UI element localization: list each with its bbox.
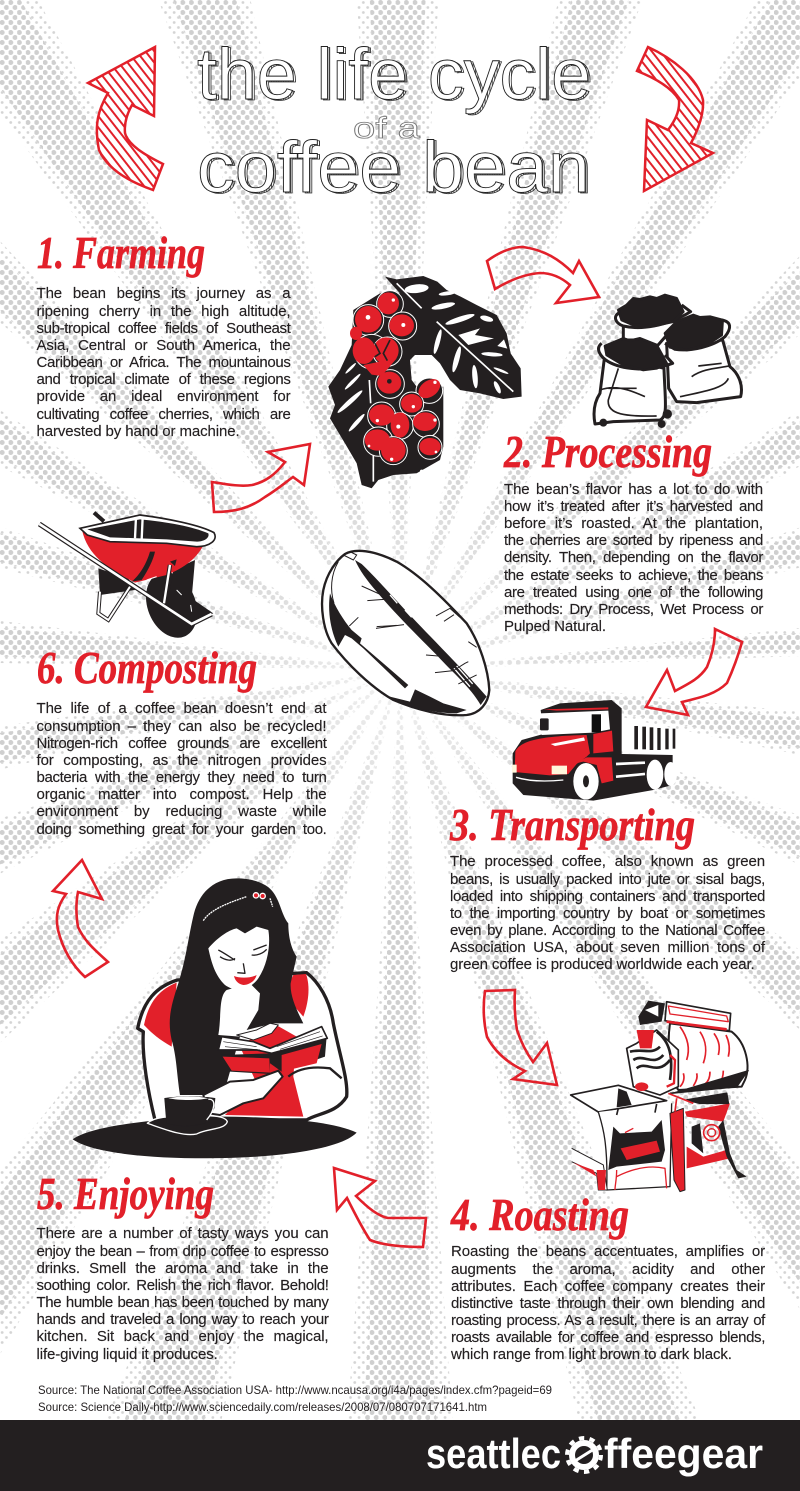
sources: Source: Science Daily-http://www.sciencedaily.com/releases/2008/07/080707171641.htm [38,1400,487,1414]
panel: 2. Processing: the cherries are sorted by ripeness and [504,532,763,549]
icon: wheelbarrow [39,513,215,645]
panel: 1. Farming: The bean begins its journey as a [36,285,290,302]
panel: 1. Farming: Caribbean or Africa. The mountainous [36,354,290,371]
panel: 6. Composting: The life of a coffee bean doesn’t end at [36,700,326,717]
panel: 4. Roasting: attributes. Each coffee company creates their [451,1278,765,1295]
footer bar with logo: ffeegear [604,1430,763,1477]
panel: 2. Processing: methods: Dry Process, Wet Process or [504,601,763,618]
panel: 4. Roasting: 4. Roasting [450,1190,629,1240]
panel: 4. Roasting: distinctive taste through their own blending and [451,1295,765,1312]
panel: 5. Enjoying: life-giving liquid it produces. [36,1346,218,1363]
panel: 2. Processing [503,427,764,635]
arrow: farming to processing [487,247,599,303]
panel: 6. Composting: for composting, as the nitrogen provides [36,752,326,769]
panel: 6. Composting: environment by reducing waste while [36,803,326,820]
panel: 3. Transporting: loaded into shipping containers and transported [450,888,765,905]
title: coffee bean [199,129,592,209]
title: the life cycle [197,35,591,115]
panel: 1. Farming: harvested by hand or machine. [36,423,240,440]
sources: Source: The National Coffee Association USA- http://www.ncausa.org/i4a/pages/index.cfm?pageid=69 [38,1383,552,1397]
icon: coffee sacks [594,295,741,428]
icon: coffee bean [322,551,489,715]
footer bar with logo: seattlec [426,1430,561,1477]
panel: 2. Processing: density. Then, depending on the flavor [504,549,763,566]
arrow: enjoying to composting [53,860,108,977]
panel: 5. Enjoying: There are a number of tasty ways you can [36,1225,328,1242]
panel: 1. Farming: cultivating coffee cherries, which are [36,406,290,423]
panel: 5. Enjoying: enjoy the bean – from drip coffee to espresso [36,1243,328,1260]
icon: coffee roaster machine [571,1001,748,1192]
panel: 2. Processing: before it’s roasted. At the plantation, [504,515,763,532]
panel: 5. Enjoying: 5. Enjoying [36,1169,214,1219]
panel: 2. Processing: are treated using one of the following [504,584,763,601]
panel: 5. Enjoying: kitchen. Sit back and enjoy the magical, [36,1328,328,1345]
panel: 3. Transporting [449,800,766,973]
panel: 3. Transporting: to the importing country by boat or sometimes [450,905,765,922]
panel: 2. Processing: how it’s treated after it’s harvested and [504,498,763,515]
title: of a [353,112,420,145]
panel: 2. Processing: the estate seeks to achieve, the beans [504,567,763,584]
panel: 1. Farming: sub-tropical coffee fields of Southeast [36,320,290,337]
panel: 3. Transporting: green coffee is produced worldwide each year. [450,956,755,973]
title [197,35,593,209]
panel: 3. Transporting: even by plane. According to the National Coffee [450,922,765,939]
panel: 2. Processing: Pulped Natural. [504,618,606,635]
icon: truck [512,700,677,801]
panel: 2. Processing: 2. Processing [503,427,712,477]
panel: 6. Composting: bacteria with the energy they need to turn [36,769,326,786]
icon: woman reading with coffee [73,878,357,1158]
panel: 1. Farming: Asia, Central or South America, the [36,337,290,354]
arrow: title left hatched [88,47,163,190]
panel: 1. Farming: ripening cherry in the high altitude, [36,303,290,320]
title: the life cycle [199,36,593,116]
panel: 1. Farming: provide an ideal environment for [36,388,290,405]
panel: 1. Farming [36,228,291,440]
panel: 3. Transporting: Association USA, about seven million tons of [450,939,765,956]
panel: 5. Enjoying: soothing color. Relish the rich flavor. Behold! [36,1277,328,1294]
panel: 6. Composting: doing something great for your garden too. [36,821,326,838]
panel: 5. Enjoying: hands and traveled a long way to reach your [36,1311,328,1328]
panel: 4. Roasting: roasting process. As a result, there is an array of [451,1312,765,1329]
panel: 6. Composting: consumption – they can also be recycled! [36,718,326,735]
sources [38,1383,552,1414]
panel: 4. Roasting [450,1190,766,1363]
icon: coffee branch with cherries [328,276,522,488]
panel: 6. Composting: Nitrogen-rich coffee grounds are excellent [36,735,326,752]
panel: 4. Roasting: roasts available for coffee and espresso blends, [451,1329,765,1346]
panel: 5. Enjoying [36,1169,329,1363]
arrow: title right hatched [637,47,713,191]
arrow: processing to transporting [646,629,742,715]
panel: 6. Composting: 6. Composting [36,643,256,693]
panel: 6. Composting [36,643,327,838]
panel: 4. Roasting: Roasting the beans accentuates, amplifies or [451,1243,765,1260]
panel: 5. Enjoying: The humble bean has been touched by many [36,1294,328,1311]
panel: 4. Roasting: which range from light brown to dark black. [451,1346,732,1363]
panel: 5. Enjoying: drinks. Smell the aroma and take in the [36,1260,328,1277]
panel: 1. Farming: 1. Farming [36,228,204,278]
panel: 3. Transporting: beans, is usually packed into jute or sisal bags, [450,871,765,888]
panel: 2. Processing: The bean’s flavor has a lot to do with [504,481,763,498]
arrow: transporting to roasting [484,990,557,1085]
arrow: enjoying/composting to farming [212,444,310,512]
panel: 6. Composting: organic matter into compost. Help the [36,786,326,803]
footer bar with logo [0,1420,800,1491]
panel: 4. Roasting: augments the aroma, acidity and other [451,1261,765,1278]
title: coffee bean [197,128,590,208]
arrow: roasting to enjoying [334,1168,426,1247]
panel: 3. Transporting: 3. Transporting [449,800,695,850]
panel: 1. Farming: and tropical climate of these regions [36,371,290,388]
panel: 3. Transporting: The processed coffee, also known as green [450,853,765,870]
